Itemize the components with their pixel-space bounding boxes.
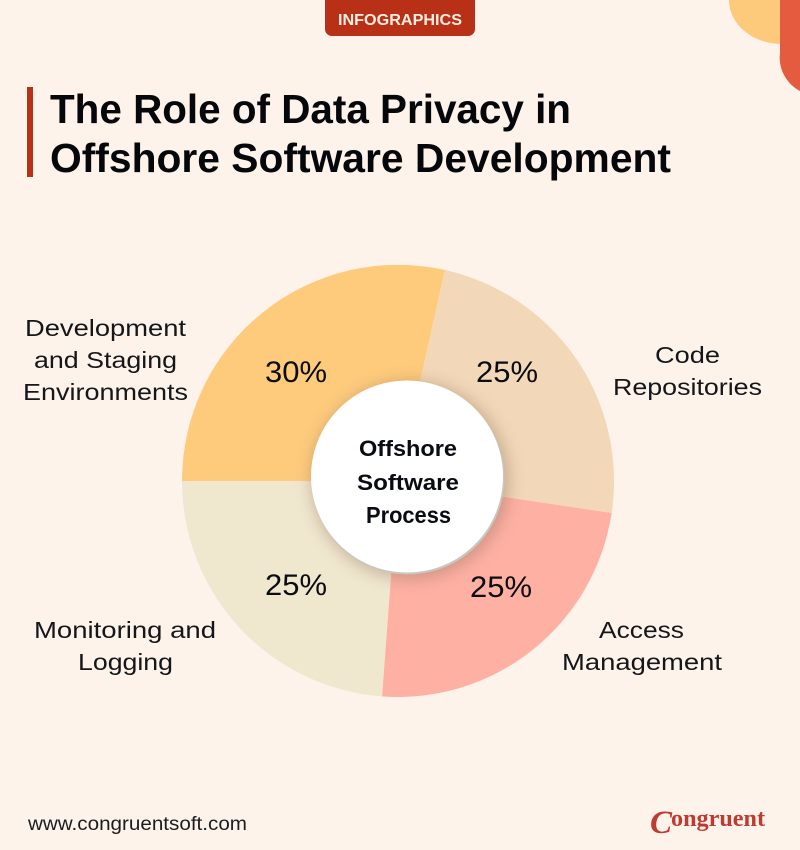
title	[27, 86, 671, 181]
label: development and staging environments: Environments	[23, 379, 188, 405]
label: code repositories: Code	[655, 342, 720, 368]
segment: access management 25%	[382, 481, 612, 697]
logo: congruent: ongruent	[671, 806, 765, 832]
label: monitoring and logging: Logging	[78, 649, 173, 675]
logo: congruent	[650, 805, 765, 841]
label: monitoring and logging	[34, 617, 216, 675]
center circle: Offshore	[359, 436, 457, 461]
badge: infographics	[325, 0, 475, 36]
center circle: Software	[357, 470, 459, 495]
value: 25% code repositories: 25%	[476, 356, 538, 389]
value: 25% access management: 25%	[470, 571, 532, 604]
segment: monitoring and logging 25%	[182, 481, 398, 696]
segment: code repositories 25%	[398, 270, 614, 513]
website url: www.congruentsoft.com	[27, 814, 247, 835]
label: development and staging environments: and Staging	[34, 347, 177, 373]
label: access management: Access	[599, 617, 684, 643]
title: Offshore Software Development	[50, 135, 671, 181]
label: code repositories	[613, 342, 762, 400]
label: development and staging environments	[23, 315, 188, 405]
title: The Role of Data Privacy in	[50, 86, 571, 132]
value: 30%: 30%	[265, 356, 327, 389]
badge: infographics: INFOGRAPHICS	[338, 12, 462, 29]
label: access management: Management	[562, 649, 723, 675]
label: development and staging environments: Development	[25, 315, 187, 341]
center circle: Process	[366, 502, 451, 528]
segment: development and staging 30%	[182, 265, 445, 481]
center circle	[311, 380, 509, 579]
label: monitoring and logging: Monitoring and	[34, 617, 216, 643]
decorative corner shapes	[729, 0, 800, 91]
label: code repositories: Repositories	[613, 374, 762, 400]
logo: congruent: C	[650, 805, 673, 841]
label: access management	[562, 617, 723, 675]
donut chart	[182, 265, 614, 697]
value: 25% monitoring: 25%	[265, 569, 327, 602]
